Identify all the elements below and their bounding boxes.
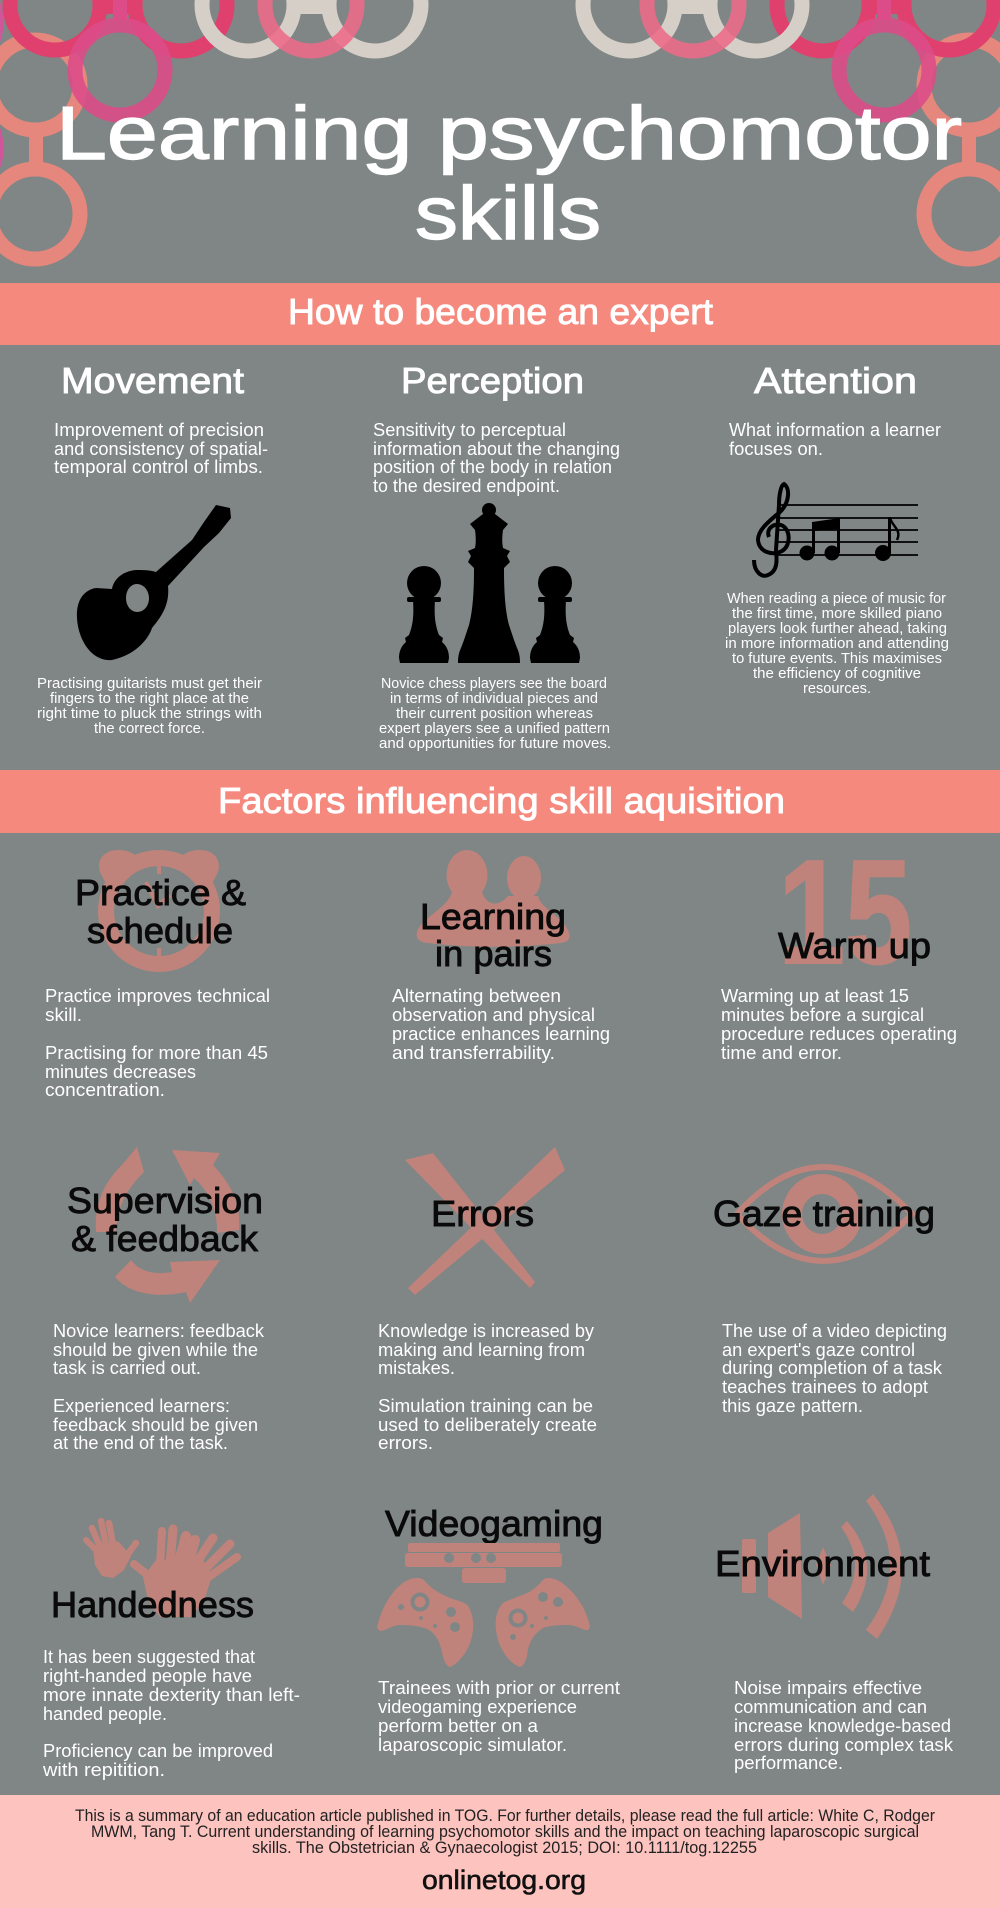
- text: warm up: minutes before a surgical: [721, 1004, 924, 1025]
- title: skills: [415, 171, 601, 255]
- text: warm up: procedure reduces operating: [721, 1023, 957, 1044]
- text: supervision: task is carried out.: [53, 1357, 201, 1378]
- heading: practice and schedule: Practice &: [75, 872, 246, 913]
- text: videogaming: [378, 1677, 620, 1755]
- text: practice: minutes decreases: [45, 1061, 196, 1082]
- citation text: MWM, Tang T. Current understanding of learning psychomotor skills and the impact on teaching laparoscopic surgical: [91, 1822, 919, 1841]
- text: movement definition: and consistency of spatial-: [54, 438, 268, 459]
- text: warm up: time and error.: [721, 1042, 842, 1063]
- text: errors: Knowledge is increased by: [378, 1320, 595, 1341]
- text: attention definition: What information a learner: [729, 419, 941, 440]
- icon: two people: [417, 850, 570, 947]
- heading: gaze training: Gaze training: [713, 1193, 935, 1234]
- text: chess example: Novice chess players see the board: [381, 675, 607, 692]
- heading: supervision and feedback: Supervision: [67, 1180, 263, 1221]
- text: guitarists example: fingers to the right place at the: [50, 690, 249, 707]
- heading: practice and schedule: schedule: [87, 910, 233, 951]
- panel: errors: [378, 1147, 597, 1453]
- text: music example: [725, 590, 949, 697]
- text: handedness: It has been suggested that: [43, 1646, 255, 1667]
- text: movement definition: Improvement of precision: [54, 419, 264, 440]
- text: environment: errors during complex task: [734, 1734, 954, 1755]
- panel: learning in pairs: [392, 850, 610, 1063]
- text: chess example: their current position whereas: [396, 705, 593, 722]
- text: music example: players look further ahead, taking: [728, 620, 947, 637]
- text: environment: Noise impairs effective: [734, 1677, 922, 1698]
- heading: supervision and feedback: & feedback: [71, 1218, 259, 1259]
- panel: gaze training: [713, 1167, 947, 1416]
- text: chess example: [379, 675, 611, 752]
- banner: how to become an expert: How to become an expert: [288, 291, 713, 332]
- banner: how to become an expert: [0, 283, 1000, 345]
- title: Learning psychomotor: [56, 91, 962, 175]
- panel: warm up: [721, 830, 957, 1063]
- panel: attention: [725, 360, 949, 697]
- icon: number 15: 15: [778, 830, 912, 995]
- heading: errors: Errors: [431, 1193, 534, 1234]
- text: practice: skill.: [45, 1004, 82, 1025]
- text: gaze training: [722, 1320, 947, 1416]
- text: guitarists example: Practising guitarists must get their: [37, 675, 262, 692]
- text: environment: communication and can: [734, 1696, 927, 1717]
- text: learning in pairs: [392, 985, 610, 1063]
- footer panel: [0, 1795, 1000, 1908]
- text: supervision: at the end of the task.: [53, 1432, 228, 1453]
- text: errors: Simulation training can be: [378, 1395, 593, 1416]
- title: [56, 91, 962, 255]
- panel: environment: [715, 1494, 954, 1773]
- panel: movement: [37, 360, 268, 737]
- panel: supervision and feedback: [53, 1147, 265, 1453]
- text: supervision: Experienced learners:: [53, 1395, 230, 1416]
- heading: attention: Attention: [754, 360, 917, 401]
- text: guitarists example: the correct force.: [94, 720, 205, 737]
- text: handedness: more innate dexterity than left-: [43, 1684, 300, 1705]
- website link: onlinetog.org: [422, 1865, 586, 1895]
- text: errors: making and learning from: [378, 1339, 585, 1360]
- text: gaze training: teaches trainees to adopt: [722, 1376, 928, 1397]
- text: perception definition: information about the changing: [373, 438, 620, 459]
- text: music example: in more information and attending: [725, 635, 949, 652]
- text: gaze training: The use of a video depicting: [722, 1320, 947, 1341]
- text: guitarists example: right time to pluck the strings with: [37, 705, 262, 722]
- text: supervision: should be given while the: [53, 1339, 258, 1360]
- icon: alarm clock: [99, 850, 219, 964]
- text: practice: [45, 985, 270, 1100]
- text: handedness: Proficiency can be improved: [43, 1740, 273, 1761]
- text: practice: concentration.: [45, 1079, 165, 1100]
- text: errors: errors.: [378, 1432, 433, 1453]
- icon: hands: [86, 1521, 237, 1617]
- heading: learning in pairs: Learning: [420, 896, 566, 937]
- text: perception definition: Sensitivity to perceptual: [373, 419, 566, 440]
- text: practice: Practice improves technical: [45, 985, 270, 1006]
- text: gaze training: during completion of a task: [722, 1357, 943, 1378]
- text: handedness: [42, 1646, 300, 1780]
- text: perception definition: to the desired endpoint.: [373, 475, 560, 496]
- icon: eye: [737, 1167, 912, 1261]
- citation text: [75, 1806, 935, 1857]
- text: gaze training: this gaze pattern.: [722, 1395, 863, 1416]
- text: attention definition: focuses on.: [729, 438, 823, 459]
- decorative rings: top left: [0, 0, 421, 259]
- text: learning in pairs: observation and physical: [392, 1004, 595, 1025]
- panel: perception: [373, 360, 620, 752]
- citation text: This is a summary of an education article published in TOG. For further details, please read the full article: White C, Rodger: [75, 1806, 935, 1825]
- heading: warm up: Warm up: [778, 925, 931, 966]
- text: videogaming: laparoscopic simulator.: [378, 1734, 567, 1755]
- text: practice: Practising for more than 45: [45, 1042, 268, 1063]
- panel: videogaming: [377, 1503, 620, 1755]
- text: handedness: with repitition.: [42, 1759, 165, 1780]
- banner: factors influencing skill acquisition: [0, 770, 1000, 833]
- text: handedness: handed people.: [43, 1703, 167, 1724]
- panel: practice and schedule: [45, 850, 270, 1100]
- heading: videogaming: Videogaming: [385, 1503, 603, 1544]
- text: videogaming: perform better on a: [378, 1715, 539, 1736]
- text: videogaming: Trainees with prior or current: [378, 1677, 620, 1698]
- text: supervision: feedback should be given: [53, 1414, 258, 1435]
- text: music example: resources.: [803, 680, 871, 697]
- heading: perception: Perception: [401, 360, 584, 401]
- text: videogaming: videogaming experience: [378, 1696, 577, 1717]
- icon: speaker: [742, 1494, 902, 1639]
- text: attention definition: [729, 419, 941, 459]
- text: learning in pairs: and transferrability.: [392, 1042, 555, 1063]
- text: gaze training: an expert's gaze control: [722, 1339, 915, 1360]
- text: errors: [378, 1320, 597, 1453]
- text: music example: the efficiency of cognitive: [753, 665, 921, 682]
- text: perception definition: position of the body in relation: [373, 456, 612, 477]
- text: music example: the first time, more skilled piano: [732, 605, 942, 622]
- text: environment: increase knowledge-based: [734, 1715, 951, 1736]
- heading: practice and schedule: [75, 872, 246, 951]
- text: music example: When reading a piece of music for: [727, 590, 946, 607]
- text: warm up: Warming up at least 15: [721, 985, 909, 1006]
- text: chess example: and opportunities for future moves.: [379, 735, 611, 752]
- text: music example: to future events. This maximises: [732, 650, 942, 667]
- text: errors: used to deliberately create: [378, 1414, 597, 1435]
- text: learning in pairs: Alternating between: [392, 985, 561, 1006]
- icon: music staff: [754, 484, 918, 576]
- heading: supervision and feedback: [67, 1180, 263, 1259]
- icon: chess pieces: [399, 503, 580, 663]
- panel: handedness: [42, 1521, 300, 1780]
- text: handedness: right-handed people have: [43, 1665, 252, 1686]
- text: guitarists example: [37, 675, 262, 737]
- heading: environment: Environment: [715, 1543, 930, 1584]
- text: movement definition: temporal control of limbs.: [54, 456, 263, 477]
- heading: handedness: Handedness: [51, 1584, 254, 1625]
- text: errors: mistakes.: [378, 1357, 455, 1378]
- heading: movement: Movement: [61, 360, 244, 401]
- text: supervision: Novice learners: feedback: [53, 1320, 265, 1341]
- heading: learning in pairs: [420, 896, 566, 974]
- text: environment: performance.: [734, 1752, 843, 1773]
- text: learning in pairs: practice enhances learning: [392, 1023, 610, 1044]
- banner: factors influencing skill acquisition: Factors influencing skill aquisition: [218, 780, 785, 821]
- icon: cycle arrows: [96, 1147, 239, 1303]
- citation text: skills. The Obstetrician & Gynaecologist 2015; DOI: 10.1111/tog.12255: [252, 1838, 757, 1857]
- text: chess example: in terms of individual pieces and: [390, 690, 598, 707]
- icon: cross: [405, 1147, 565, 1295]
- icon: guitar: [77, 505, 231, 660]
- text: movement definition: [54, 419, 268, 477]
- icon: motion sensor and game controllers: [377, 1543, 590, 1667]
- text: supervision: [53, 1320, 265, 1453]
- text: warm up: [721, 985, 957, 1063]
- heading: learning in pairs: in pairs: [435, 933, 552, 974]
- text: perception definition: [373, 419, 620, 496]
- text: environment: [734, 1677, 954, 1773]
- text: chess example: expert players see a unified pattern: [379, 720, 610, 737]
- decorative rings: top right: [583, 0, 1000, 259]
